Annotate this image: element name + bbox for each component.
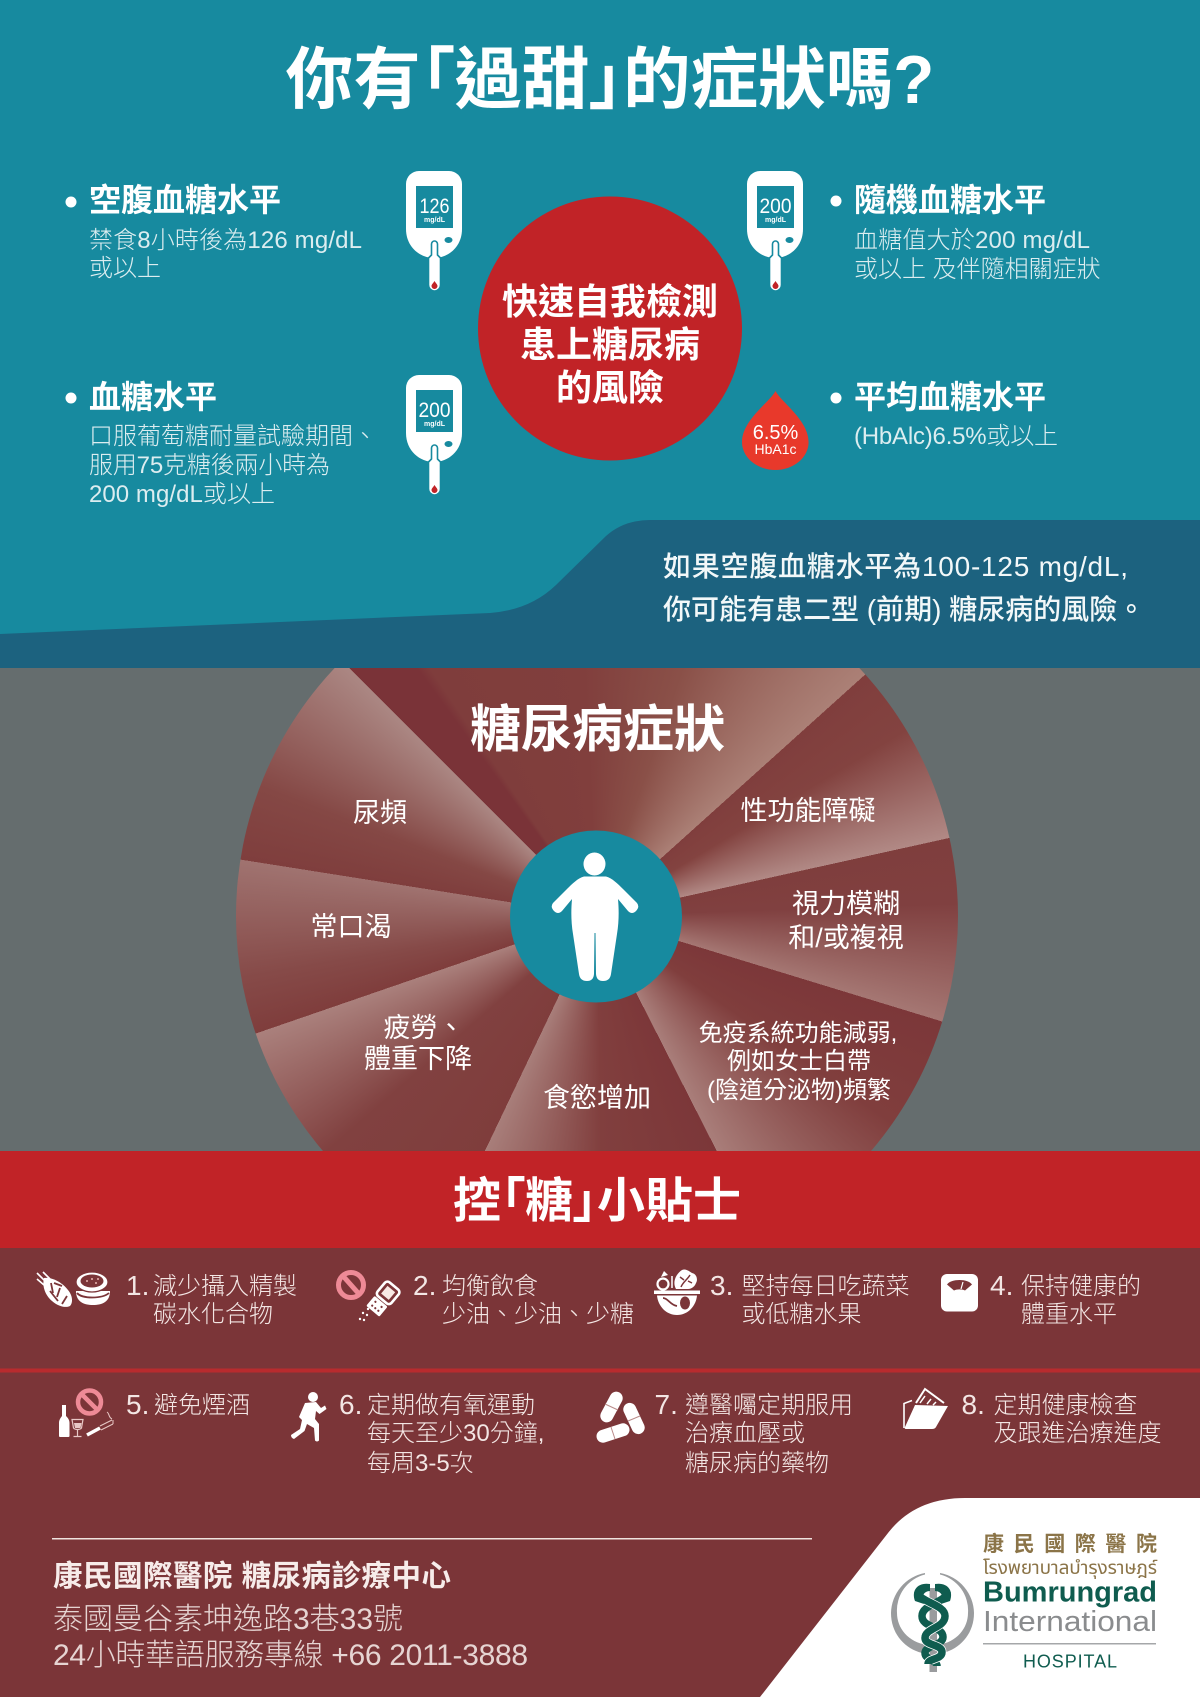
tip 2: 2. [413,1270,436,1301]
tip 6: 6. [339,1389,362,1420]
tip 6: 每天至少30分鐘, [367,1420,544,1447]
tip 5: 5. [126,1389,149,1420]
tip 5: 避免煙酒 [154,1392,250,1419]
red circle: 患上糖尿病 [520,324,700,365]
label: increased appetite: 食慾增加 [543,1083,651,1113]
label: sexual dysfunction: 性功能障礙 [740,796,876,826]
tip 4: 體重水平 [1021,1301,1117,1328]
tip 7 [654,1389,853,1477]
icon: meter 200 right [747,171,803,291]
label: thirst: 常口渴 [310,912,392,942]
text block: glucose tolerance: 血糖水平 [89,379,217,415]
icon: blood drop HbA1c: 6.5% [753,422,799,444]
tip 7: 7. [654,1389,678,1420]
panel: diabetes symptoms wheel [0,668,1200,1152]
tip 2: 少油、少油、少糖 [442,1294,634,1329]
dark band callout: 如果空腹血糖水平為100-125 mg/dL, [663,551,1128,582]
icon: wheat and bowls [37,1272,110,1307]
icon: person in teal circle [510,830,682,1002]
icon: meter 200 right: 200 [760,195,792,218]
tip 8: 及跟進治療進度 [994,1420,1162,1447]
text block: average [830,379,1058,450]
label: blurred vision [788,889,904,953]
logo: Bumrungrad: Bumrungrad [983,1576,1157,1608]
label: frequent urination: 尿頻 [353,798,407,828]
icon: runner [291,1392,326,1442]
icon: no smoking or alcohol [59,1390,113,1437]
icon: meter 200 left: mg/dL [424,421,446,428]
text block: fasting: 或以上 [89,255,161,282]
tip 4: 保持健康的 [1021,1273,1141,1300]
tip 3: 或低糖水果 [742,1301,862,1328]
chart: radial wheel [236,555,958,1277]
heading band: 控「糖」小貼士 [453,1175,741,1228]
icon: meter 126 [406,171,462,291]
contact block: 康民國際醫院 糖尿病診療中心 [53,1560,451,1593]
icon: meter 126: mg/dL [424,217,446,224]
tip 6: 定期做有氧運動 [367,1392,535,1419]
tip 1 [126,1270,297,1328]
icon: meter 200 left [406,375,462,495]
label: blurred vision: 和/或複視 [788,923,904,953]
label: fatigue [364,1006,472,1074]
text block: fasting: 空腹血糖水平 [89,182,281,218]
icon: meter 126: 126 [420,195,450,218]
logo: Bumrungrad: 康民國際醫院 [983,1532,1157,1556]
panel: quick self check [0,0,1200,668]
label: fatigue: 體重下降 [364,1044,472,1074]
tip 1: 減少攝入精製 [153,1273,297,1300]
label: weak immunity: 例如女士白帶 [727,1048,871,1075]
label: weak immunity [699,1020,897,1104]
tip 4 [990,1270,1141,1328]
contact block: 泰國曼谷素坤逸路3巷33號 [53,1603,403,1636]
tip 8: 8. [962,1389,985,1420]
tip 3 [710,1270,910,1328]
icon: no salt [338,1272,401,1321]
tip 8: 定期健康檢查 [994,1392,1138,1419]
label: weak immunity: (陰道分泌物)頻繁 [707,1077,891,1104]
contact block: 24小時華語服務專線 +66 2011-3888 [53,1639,528,1672]
text block: random [830,182,1101,283]
tip 3: 堅持每日吃蔬菜 [742,1273,910,1300]
contact block [53,1560,528,1672]
text block: fasting [66,182,362,282]
red circle: 快速自我檢測 [502,281,718,322]
red circle [478,196,742,460]
tip 6: 每周3-5次 [367,1450,474,1477]
text block: average: 平均血糖水平 [854,379,1046,415]
icon: meter 200 left: 200 [418,399,450,422]
text block: average: (HbAlc)6.5%或以上 [854,423,1058,450]
text block: glucose tolerance: 服用75克糖後兩小時為 [89,452,330,479]
dark band callout: 你可能有患二型 (前期) 糖尿病的風險。 [663,588,1145,628]
heading: symptoms: 糖尿病症狀 [470,701,725,758]
tip 5 [126,1389,250,1420]
logo: Bumrungrad: International [983,1606,1157,1638]
text block: random: 血糖值大於200 mg/dL [854,227,1090,254]
icon: blood drop HbA1c [742,391,809,470]
text block: fasting: 禁食8小時後為126 mg/dL [89,227,362,254]
icon: folder [904,1389,948,1429]
icon: blood drop HbA1c: HbA1c [754,441,797,457]
icon: meter 200 right: mg/dL [765,217,787,224]
logo: Bumrungrad [891,1532,1158,1672]
icon: salad bowl [654,1269,700,1315]
logo: Bumrungrad: HOSPITAL [1023,1652,1117,1672]
tip 2: 均衡飲食 [442,1273,538,1300]
logo: Bumrungrad: โรงพยาบาลบำรุงราษฎร์ [983,1554,1158,1583]
tip 6 [339,1389,544,1477]
tip 7: 糖尿病的藥物 [685,1450,829,1477]
heading band [0,1151,1200,1248]
icon: staff of Asclepius [891,1573,974,1672]
title: 你有「過甜」的症狀嗎? [286,43,934,118]
tip 7: 遵醫囑定期服用 [685,1392,853,1419]
label: blurred vision: 視力模糊 [792,889,900,919]
text block: random: 隨機血糖水平 [854,182,1046,218]
label: fatigue: 疲勞、 [384,1006,464,1045]
tip 2 [413,1270,634,1329]
tip 8 [962,1389,1162,1447]
tip 4: 4. [990,1270,1013,1301]
label: weak immunity: 免疫系統功能減弱, [699,1020,897,1047]
wheel labels and figure [310,701,904,1113]
tip 3: 3. [710,1270,733,1301]
text block: glucose tolerance: 200 mg/dL或以上 [89,481,275,508]
tip 1: 碳水化合物 [153,1301,273,1328]
white logo corner [760,1498,1200,1697]
text block: random: 或以上 及伴隨相關症狀 [854,256,1101,283]
panel: sugar control tips [0,1151,1200,1697]
tip 7: 治療血壓或 [685,1420,805,1447]
tip 1: 1. [126,1270,149,1301]
text block: glucose tolerance: 口服葡萄糖耐量試驗期間、 [89,416,377,451]
red circle: 的風險 [556,367,664,408]
icon: weighing scale [941,1274,978,1312]
dark band callout [0,520,1200,668]
icon: pills [595,1389,647,1444]
text block: glucose tolerance [66,379,377,508]
